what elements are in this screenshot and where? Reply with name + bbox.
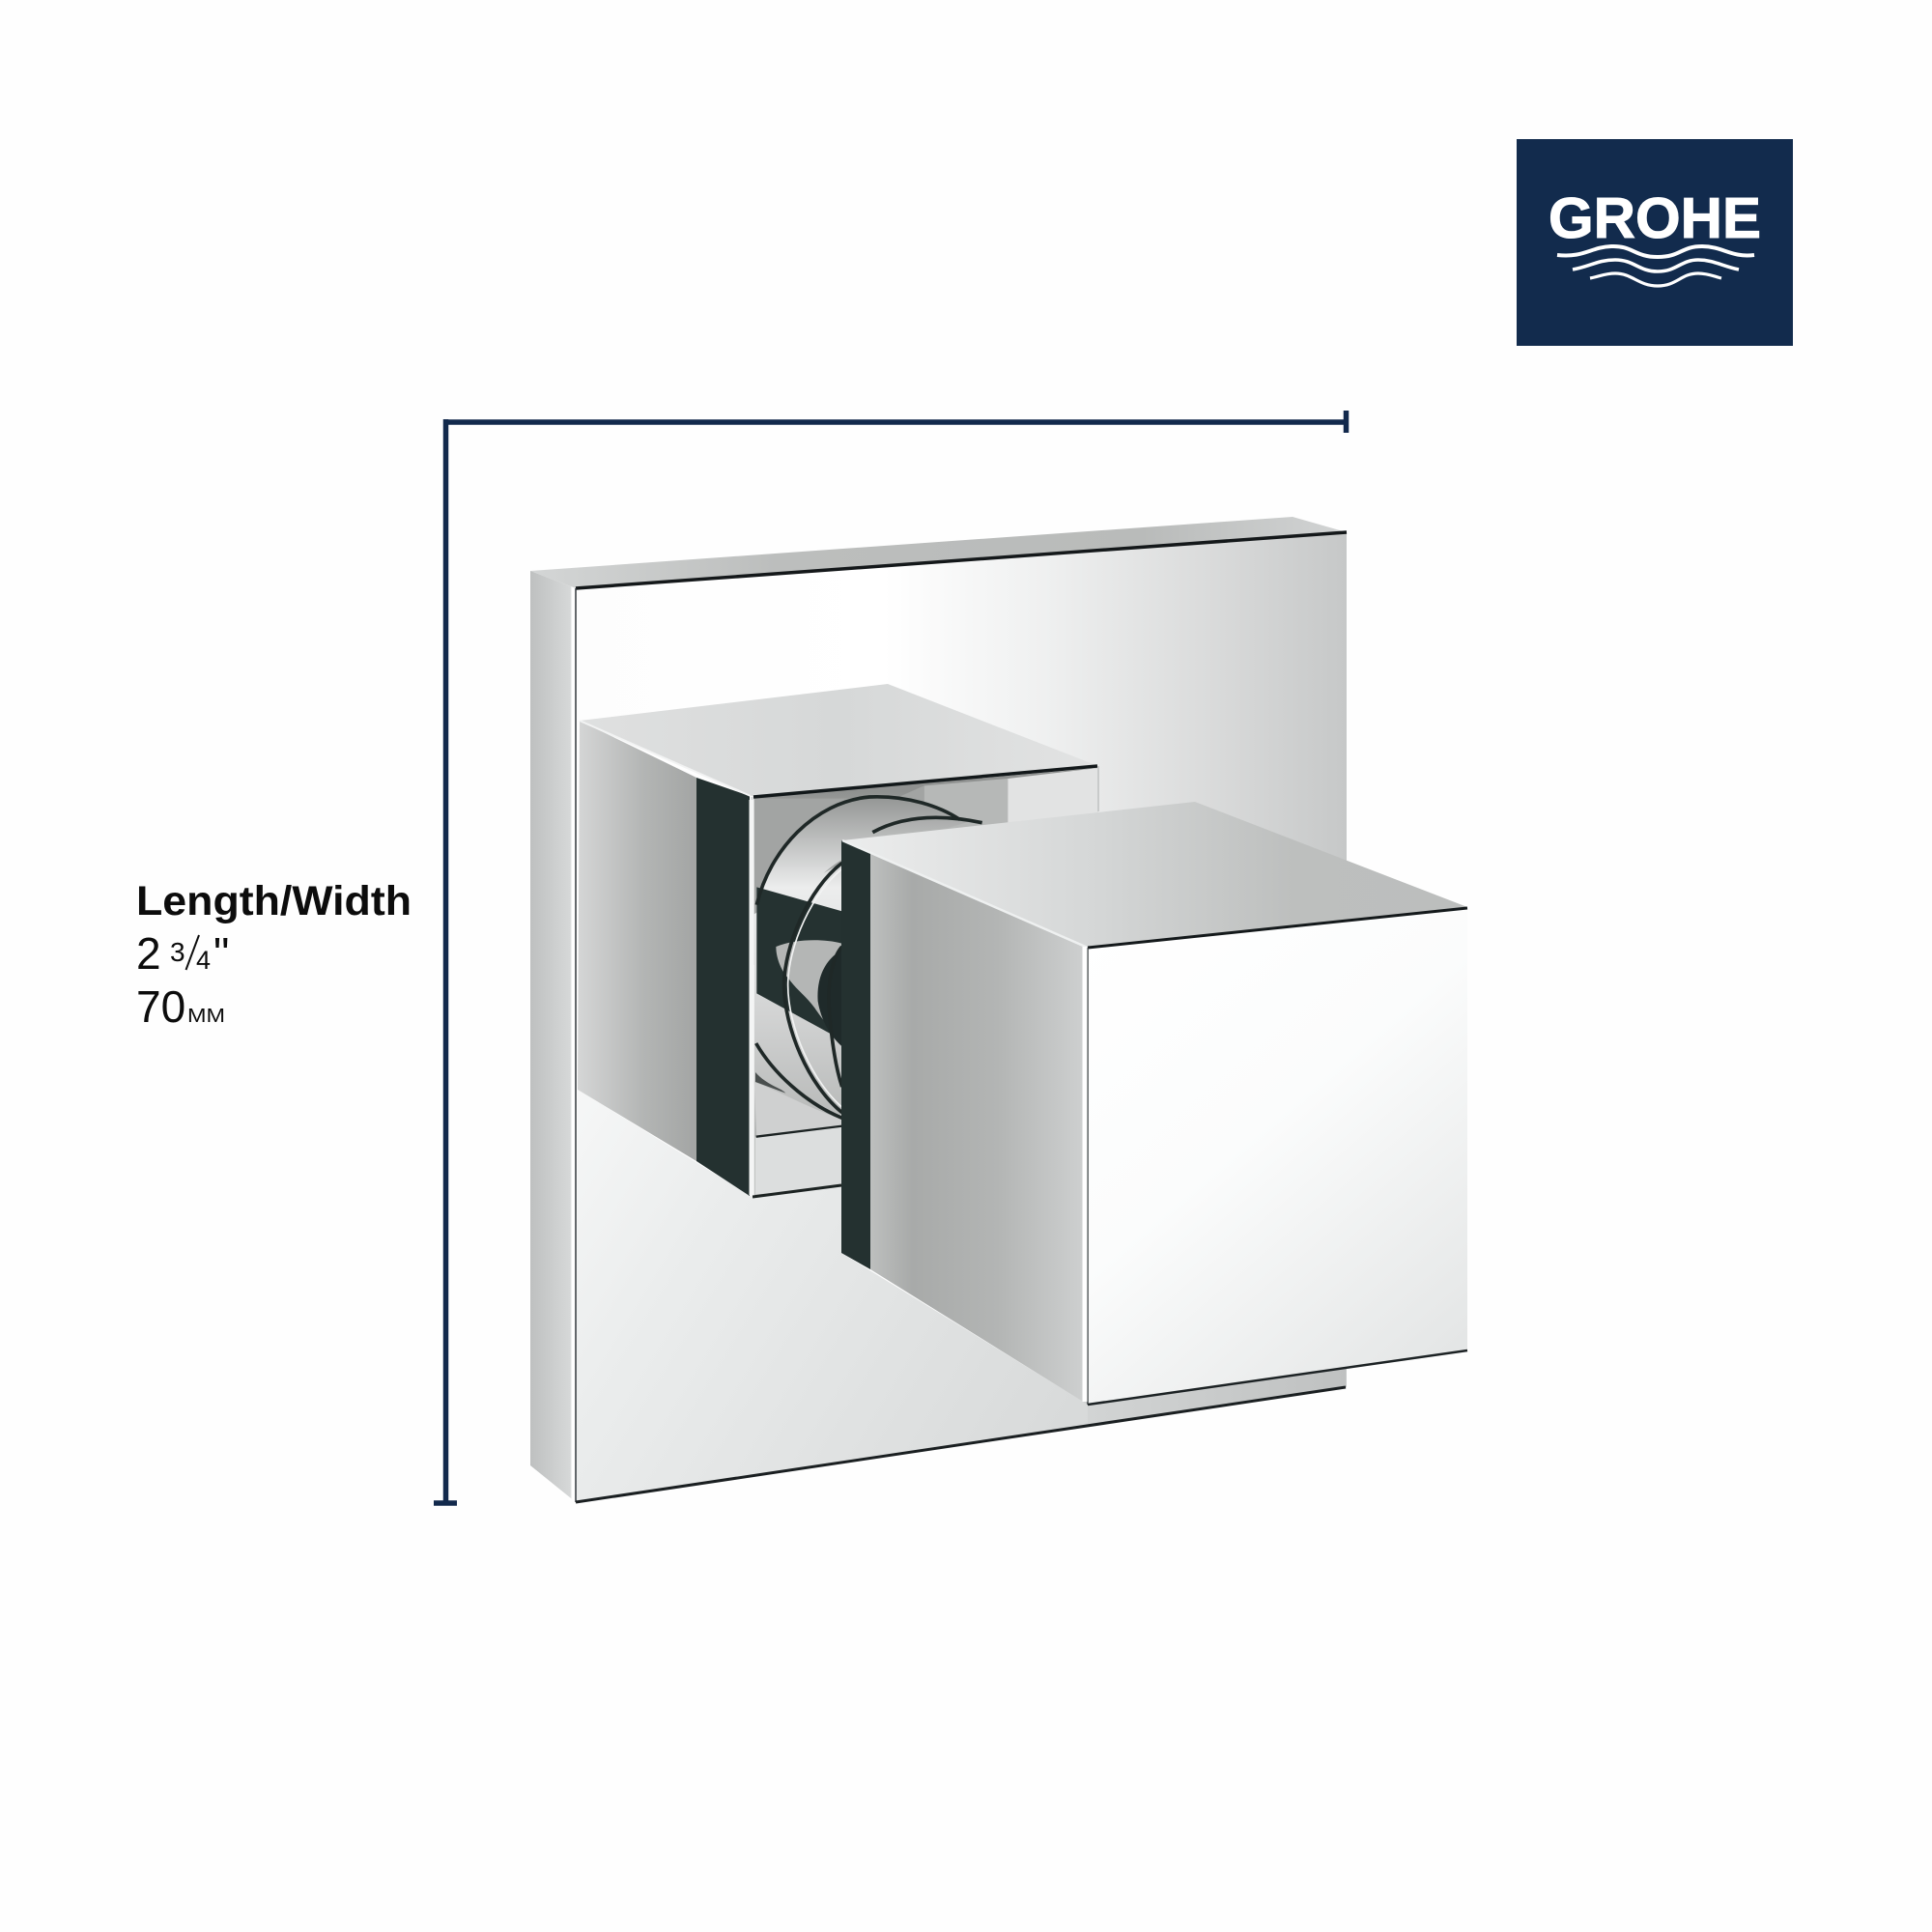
- inches value: 4: [196, 946, 211, 975]
- plate: [530, 517, 1347, 1502]
- dimension lines: [434, 411, 1347, 1503]
- millimetre value: 70: [136, 981, 185, 1032]
- dimension label: Length/Width: Length/Width: [136, 879, 412, 924]
- inches value: [136, 928, 229, 979]
- millimetre value: MM: [187, 1006, 225, 1027]
- inches value: 2: [136, 928, 161, 979]
- inches value: 3: [170, 937, 185, 967]
- millimetre value: [136, 981, 225, 1032]
- valve interior: [753, 766, 1099, 1198]
- back knob: [578, 684, 1099, 1198]
- product: shower valve trim: [530, 517, 1467, 1502]
- logo: GROHE: GROHE: [1548, 186, 1761, 250]
- logo: GROHE: [1517, 139, 1793, 346]
- icon: water waves: [1557, 246, 1754, 286]
- dimension label: Length/Width: [136, 879, 412, 1032]
- inches value: ": [213, 928, 229, 979]
- front knob: [841, 802, 1467, 1405]
